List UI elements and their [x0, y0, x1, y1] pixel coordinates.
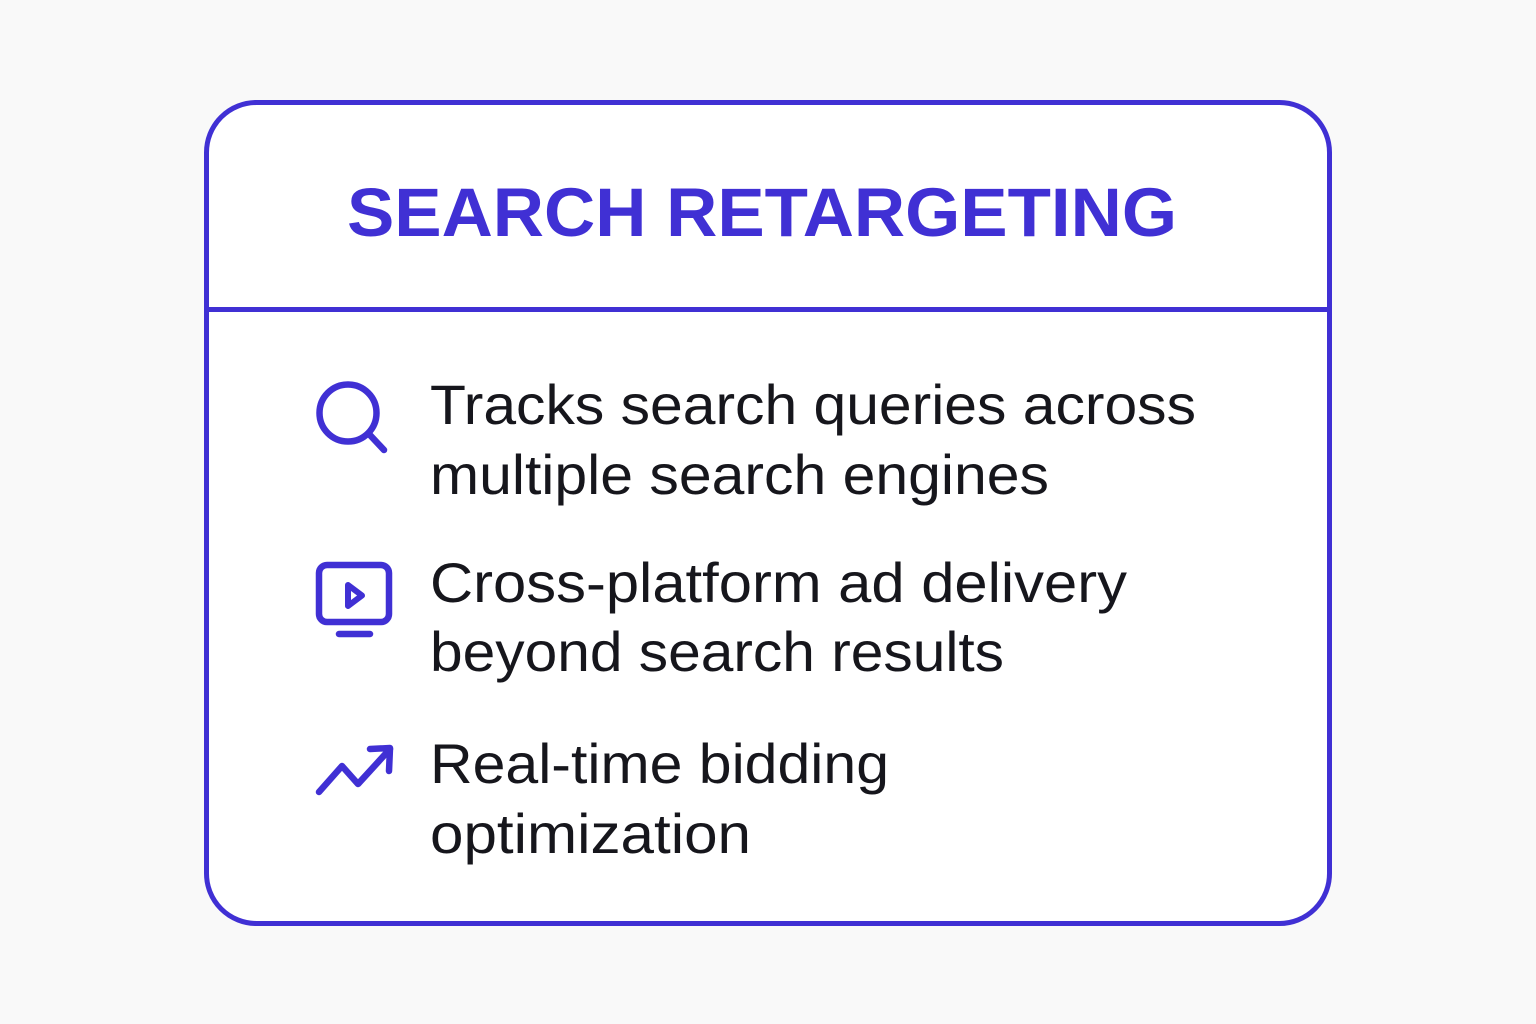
title: SEARCH RETARGETING [347, 174, 1177, 251]
item: cross-platform delivery [319, 551, 1127, 683]
card outline [206, 102, 1330, 924]
text: tracks search queries [430, 373, 1196, 506]
text: cross-platform ad delivery [430, 551, 1127, 683]
icon: trending arrow [319, 748, 390, 792]
text: tracks search queries: Tracks search queries across [430, 373, 1196, 436]
item: search queries [320, 373, 1196, 506]
icon: magnifying glass [320, 384, 384, 450]
text: real-time bidding optimization: Real-time bidding [430, 732, 889, 795]
icon: video monitor [319, 565, 389, 634]
panel: search retargeting card [206, 102, 1330, 924]
item: real-time bidding [319, 732, 889, 865]
text: real-time bidding optimization: optimization [430, 802, 751, 865]
text: cross-platform ad delivery: Cross-platform ad delivery [430, 551, 1127, 614]
text: cross-platform ad delivery: beyond search results [430, 620, 1004, 683]
text: real-time bidding optimization [430, 732, 889, 865]
text: tracks search queries: multiple search engines [430, 443, 1049, 506]
